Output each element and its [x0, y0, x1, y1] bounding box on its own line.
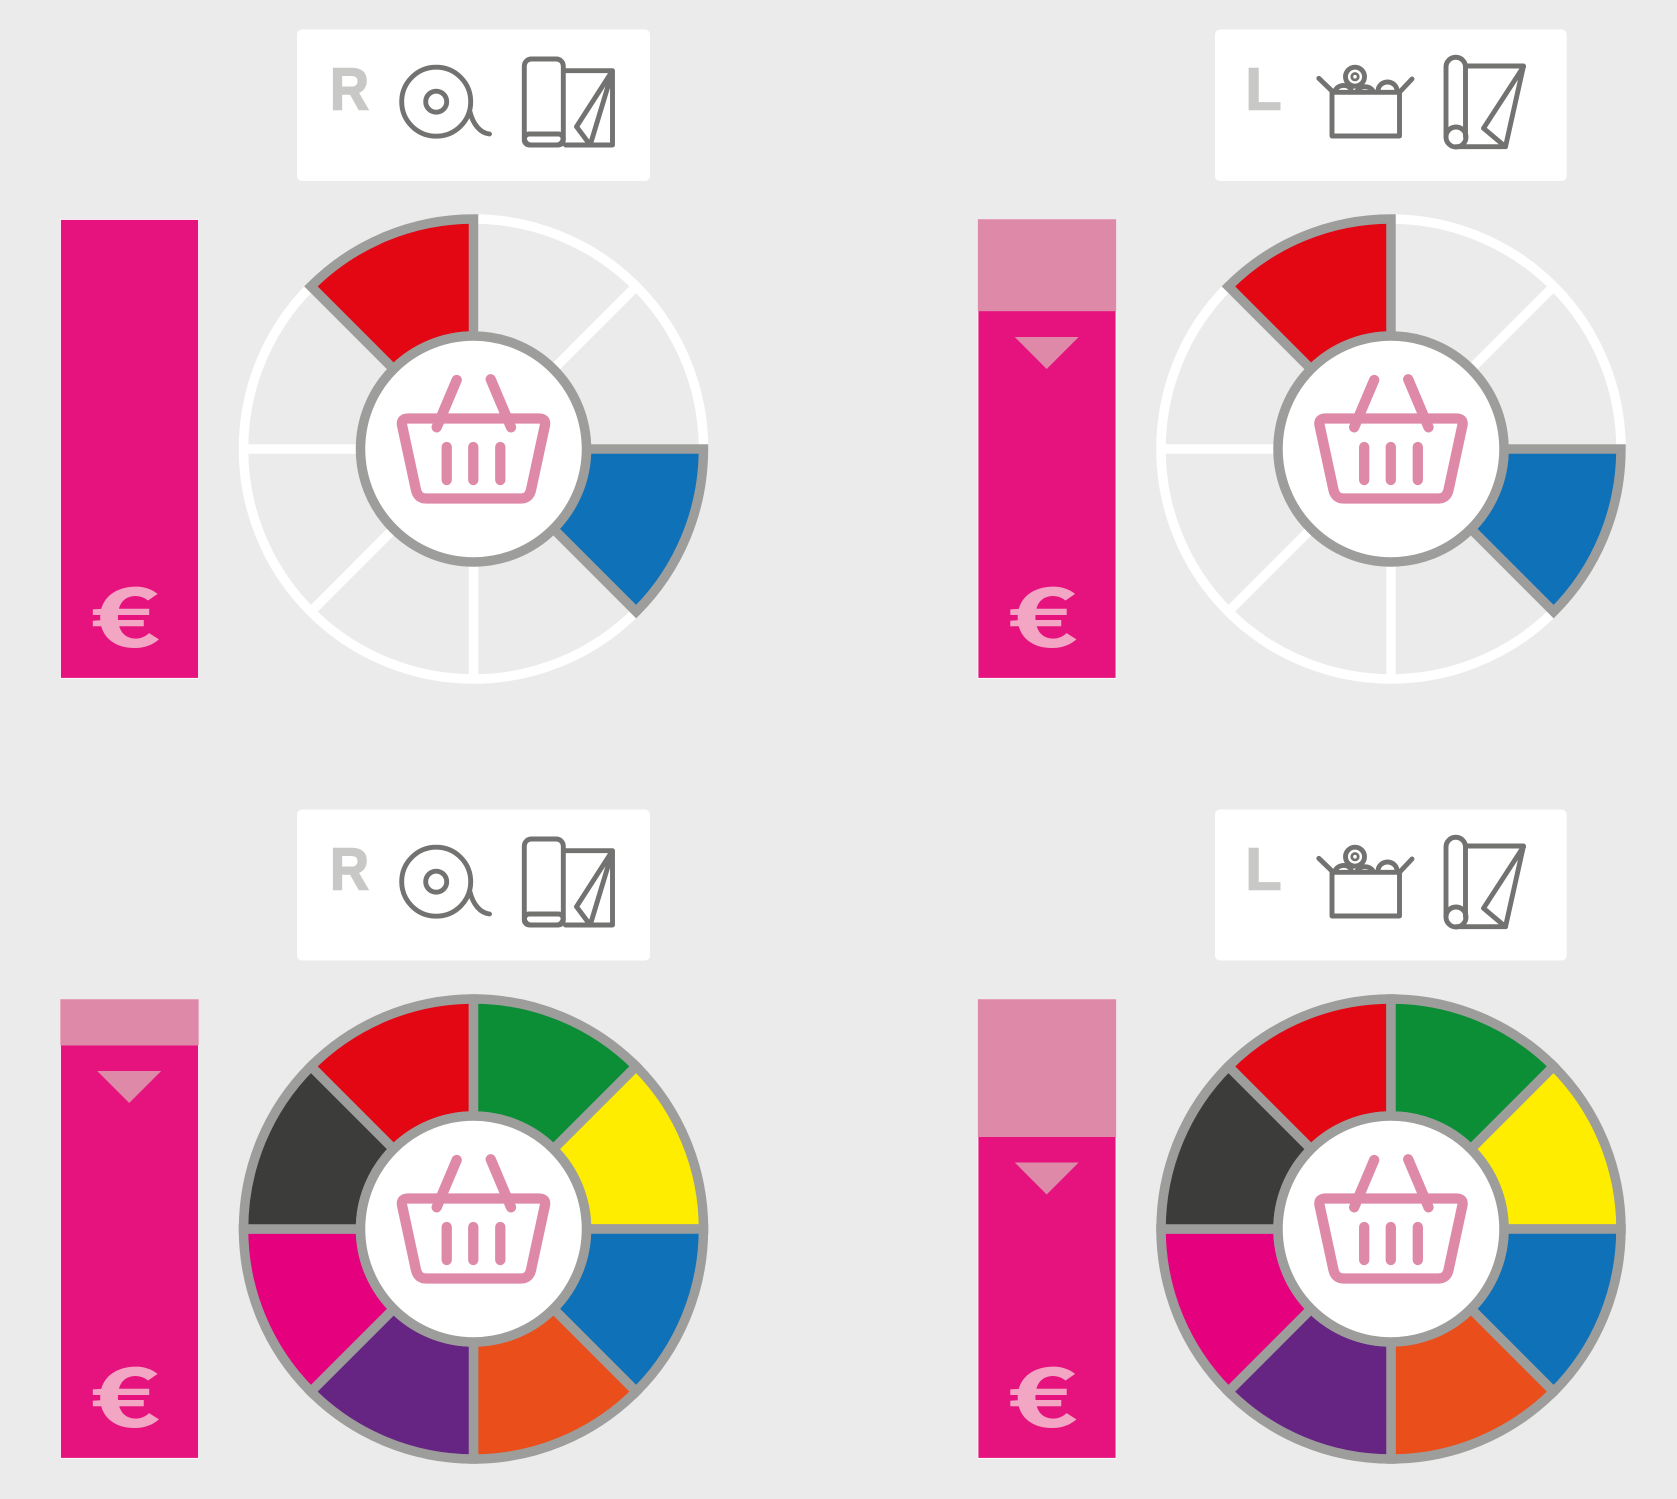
- wheel: eight colour segments: [196, 951, 751, 1499]
- euro symbol: €: [90, 552, 160, 671]
- panel: top left, R wheel empty: [60, 30, 751, 679]
- letter L: L: [1246, 56, 1282, 122]
- icon: tape roll and folded sheet: [402, 59, 612, 145]
- panel: bottom right, L wheel full: [978, 810, 1669, 1499]
- legend box L: [1215, 810, 1567, 960]
- panel: bottom left, R wheel full: [60, 810, 751, 1499]
- budget bar with pale reduced part: [60, 999, 199, 1458]
- letter R: R: [330, 836, 369, 902]
- letter L: L: [1246, 836, 1282, 902]
- budget bar: [60, 220, 198, 678]
- legend box R: [297, 810, 650, 960]
- icon: box of rolls and unrolled sheet: [1319, 57, 1524, 147]
- legend box L: [1215, 30, 1567, 181]
- wheel: eight colour segments: [1113, 951, 1669, 1499]
- budget bar with pale reduced part: [978, 999, 1116, 1458]
- budget bar with pale reduced part: [978, 219, 1116, 678]
- euro symbol: €: [90, 1332, 160, 1451]
- icon: box of rolls and unrolled sheet: [1319, 837, 1524, 927]
- panel: top right, L wheel empty: [978, 30, 1669, 679]
- euro symbol: €: [1008, 552, 1078, 671]
- wheel: red and blue segments: [244, 219, 751, 679]
- letter R: R: [330, 56, 369, 122]
- legend box R: [297, 30, 650, 181]
- icon: tape roll and folded sheet: [402, 839, 612, 925]
- euro symbol: €: [1008, 1332, 1078, 1451]
- wheel: red and blue segments: [1161, 219, 1669, 679]
